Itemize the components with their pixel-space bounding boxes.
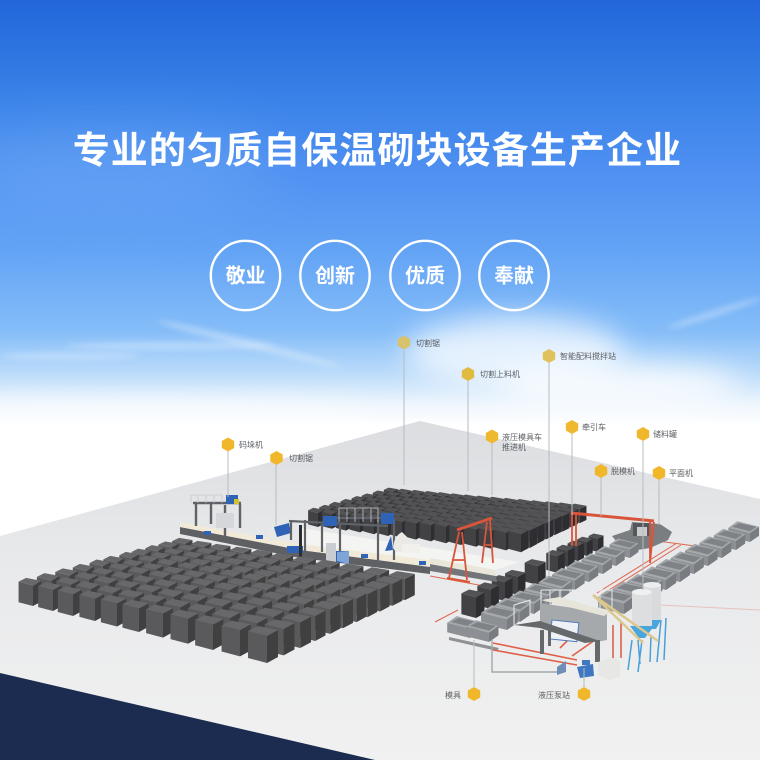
hydraulic pump xyxy=(577,664,594,678)
callout: 液压泵站 xyxy=(538,687,590,701)
callout: 液压模具车推进机 xyxy=(486,430,542,452)
callout: 平面机 xyxy=(653,466,693,480)
callout: 牵引车: 牵引车 xyxy=(582,422,606,432)
callout lines xyxy=(228,350,659,687)
callout: 切割锯 top xyxy=(398,336,440,350)
callout: 切割上料机: 切割上料机 xyxy=(480,369,520,379)
badge: 奉献 xyxy=(479,241,549,310)
right tray rows xyxy=(598,521,759,614)
navy corner xyxy=(0,673,375,760)
rear silo xyxy=(643,582,661,629)
blue sign xyxy=(550,620,579,642)
legs xyxy=(540,630,600,662)
callout: 平面机: 平面机 xyxy=(669,468,693,478)
title: 专业的匀质自保温砌块设备生产企业 xyxy=(73,130,682,171)
callout: 切割上料机 xyxy=(462,367,520,381)
callout: 液压泵站: 液压泵站 xyxy=(538,690,570,700)
callout: 牵引车 xyxy=(566,420,606,434)
control cabinets xyxy=(326,543,349,564)
value badges xyxy=(211,241,549,310)
conveyor and cutting line xyxy=(180,495,430,574)
platform railing xyxy=(514,590,612,625)
callout: 码垛机 xyxy=(222,438,263,452)
yellow screw conveyors xyxy=(593,595,658,643)
callout: 模具: 模具 xyxy=(445,690,461,700)
gantry: left xyxy=(447,518,493,582)
control cabinet xyxy=(598,657,620,680)
factory floor xyxy=(0,421,760,760)
silos xyxy=(593,582,666,672)
red rails xyxy=(430,540,760,622)
callout: 脱模机: 脱模机 xyxy=(611,466,635,476)
dark block line xyxy=(461,534,604,618)
blue drives xyxy=(204,513,426,565)
white floor strip under rear field xyxy=(300,528,520,575)
callout: 脱模机 xyxy=(595,464,635,478)
callout: 切割锯 top: 切割锯 xyxy=(416,338,440,348)
badge: 敬业 xyxy=(211,241,280,310)
conveyor belt xyxy=(180,527,430,574)
badge: 敬业: 敬业 xyxy=(226,264,266,288)
cutting frames xyxy=(289,518,394,565)
callout: 液压模具车推进机: 液压模具车 xyxy=(502,432,542,442)
gantry: right xyxy=(571,513,654,563)
front silo xyxy=(630,589,654,638)
badge: 创新: 创新 xyxy=(315,264,355,288)
callout: 模具 xyxy=(445,687,480,701)
palletizer frame xyxy=(193,503,241,539)
callout: 智能配料搅拌站: 智能配料搅拌站 xyxy=(560,351,616,361)
callout: 储料罐: 储料罐 xyxy=(653,429,677,439)
blue drive: first saw xyxy=(268,523,291,541)
red gantries xyxy=(447,513,654,582)
mixer body xyxy=(540,603,607,642)
left block field xyxy=(19,533,415,663)
mixing station xyxy=(514,590,612,662)
badge: 奉献: 奉献 xyxy=(494,264,534,288)
pipes and pump station xyxy=(492,640,620,680)
second saw housing xyxy=(385,532,420,553)
palletizer hoist xyxy=(216,513,234,528)
bottom red rails xyxy=(493,625,595,665)
mould trays xyxy=(447,538,638,651)
callout: 切割锯 lower: 切割锯 xyxy=(289,453,313,463)
blue drive: palletizer xyxy=(226,495,238,504)
callout: 液压模具车推进机: 推进机 xyxy=(502,442,526,452)
demoulding unit xyxy=(612,522,672,552)
callout: 切割锯 lower xyxy=(270,451,313,465)
rear block field xyxy=(308,488,586,552)
cart under left gantry xyxy=(430,558,497,582)
badge: 优质 xyxy=(390,241,460,310)
callout: 储料罐 xyxy=(637,427,677,441)
callout: 码垛机: 码垛机 xyxy=(239,440,263,450)
silo legs xyxy=(628,618,666,672)
badge: 优质: 优质 xyxy=(405,264,445,288)
callout: 智能配料搅拌站 xyxy=(543,349,616,363)
badge: 创新 xyxy=(300,241,370,310)
